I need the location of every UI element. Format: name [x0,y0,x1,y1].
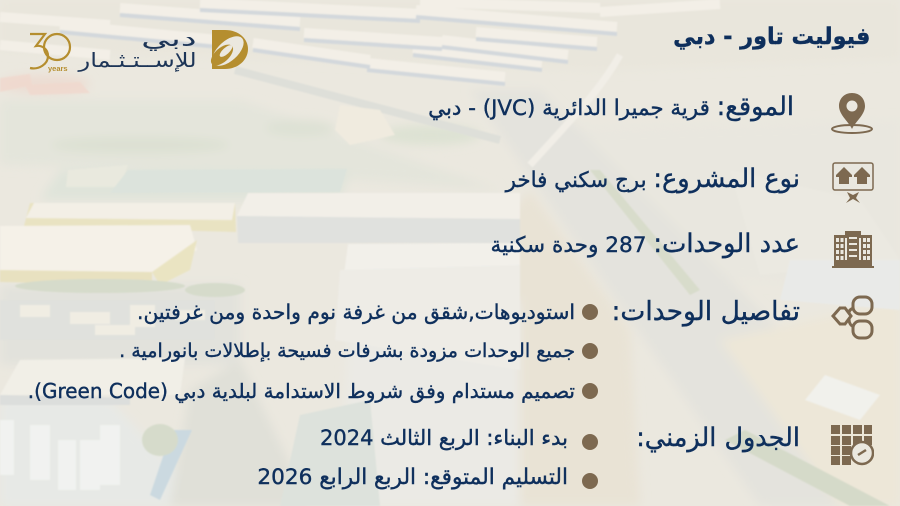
title: فيوليت تاور - دبي [673,24,870,50]
bullet text 1: استوديوهات,شقق من غرفة نوم واحدة ومن غرفتين. [137,300,575,324]
logo mark: gold D [210,30,248,69]
heading: timeline: الجدول الزمني: [636,423,800,453]
bullet 2 [582,343,598,359]
logo wordmark [78,27,197,72]
bullet text 3: تصميم مستدام وفق شروط الاستدامة لبلدية دبي (Green Code). [28,379,575,403]
icon: houses on board [832,162,874,203]
icon: building [832,231,874,268]
row: project type: نوع المشروع: برج سكني فاخر [506,164,800,194]
logo wordmark: دبي [141,27,197,51]
bullet 3 [582,383,598,399]
icon: location pin [831,93,873,134]
bullet text 1: بدء البناء: الربع الثالث 2024 [320,426,568,450]
bullet 1 [582,304,598,320]
bullet list: unit details [28,300,598,404]
bullet text 2: جميع الوحدات مزودة بشرفات فسيحة بإطلالات بانورامية . [119,339,575,362]
warehouse rows, top [0,2,720,165]
bullet 1 [582,434,598,450]
logo badge: 30 years [30,32,72,73]
bullet list: timeline [257,426,598,490]
row: location: الموقع: قرية جميرا الدائرية (JVC) - دبي [428,92,794,122]
bullet 2 [582,473,598,489]
logo wordmark: للإســتـثـمار [79,48,197,72]
icon: calendar with clock [831,425,874,466]
bullet text 2: التسليم المتوقع: الربع الرابع 2026 [257,465,568,490]
logo: Dubai Investments 30 years [30,27,248,73]
row: number of units: عدد الوحدات: 287 وحدة سكنية [491,229,800,259]
logo badge: 30 years: years [48,64,68,73]
heading: unit details: تفاصيل الوحدات: [611,296,800,327]
icon: connected nodes [831,296,874,340]
